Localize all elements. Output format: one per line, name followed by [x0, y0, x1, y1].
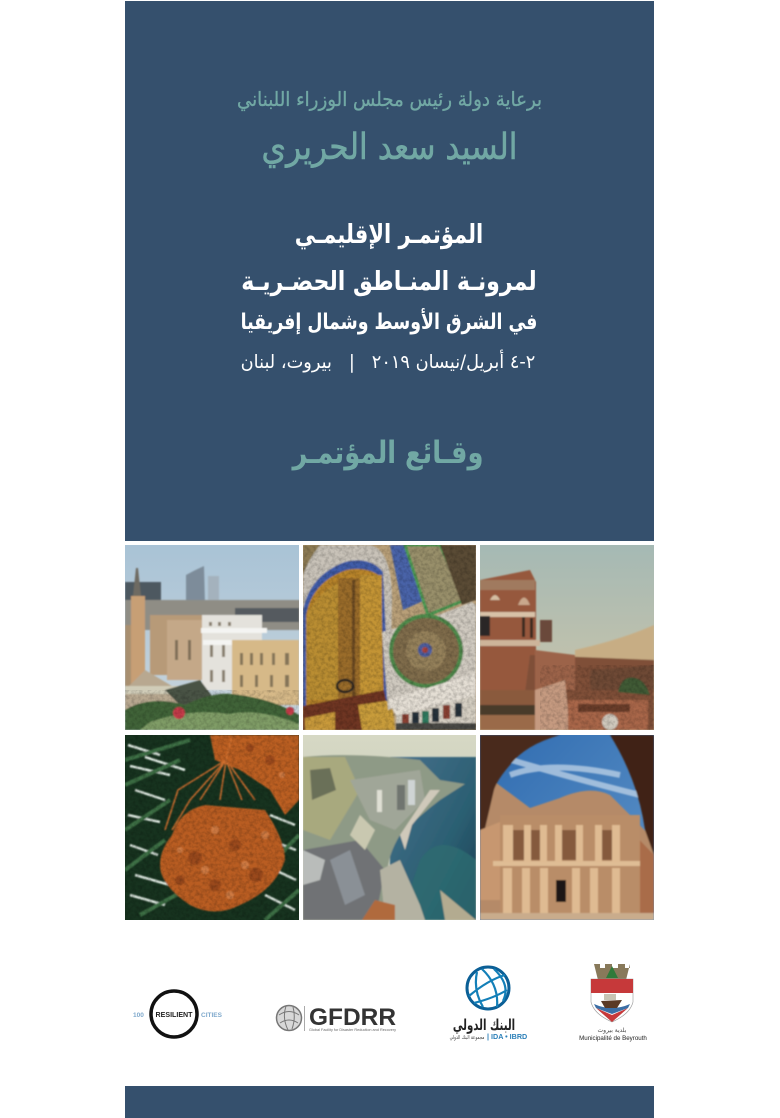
logo: GFDRR: Global Facility for Disaster Reduction and Recovery — [309, 1027, 396, 1032]
photo: Beirut downtown — [125, 545, 300, 730]
logo: World Bank: مجموعة البنك الدولي — [450, 1034, 485, 1041]
photo: Petra treasury — [480, 735, 654, 920]
logo: 100 Resilient Cities: CITIES — [201, 1012, 223, 1019]
logo: 100 Resilient Cities — [133, 991, 223, 1037]
patron name: السيد سعد الحريري — [262, 126, 517, 169]
footer band — [125, 1086, 654, 1118]
logo: GFDRR: GFDRR — [309, 1004, 396, 1031]
logo: World Bank: | IDA • IBRD — [487, 1032, 527, 1041]
logo: Municipality of Beirut: Municipalité de Beyrouth — [579, 1035, 647, 1042]
photo: Sanaa old city — [480, 545, 654, 730]
proceedings heading: وقـائع المؤتمـر — [291, 435, 483, 471]
photo: Moroccan door — [303, 545, 476, 730]
photo: Beirut coastline aerial — [303, 735, 476, 920]
logo: 100 Resilient Cities: 100 — [133, 1012, 144, 1019]
logo: Municipality of Beirut — [579, 964, 647, 1042]
logo: GFDRR — [276, 1004, 396, 1032]
logo: World Bank: البنك الدولي — [453, 1017, 515, 1035]
conference title line 2: لمرونـة المنـاطق الحضـريـة — [241, 266, 537, 296]
logo: 100 Resilient Cities: RESILIENT — [156, 1012, 193, 1019]
photo: date palm — [125, 735, 299, 920]
panel: title cover — [125, 1, 654, 541]
conference title line 3: في الشرق الأوسط وشمال إفريقيا — [241, 307, 537, 335]
patronage line: برعاية دولة رئيس مجلس الوزراء اللبناني — [237, 87, 542, 111]
conference title line 1: المؤتمـر الإقليمـي — [295, 219, 483, 250]
date and place: ٢-٤ أبريل/نيسان ٢٠١٩ | بيروت، لبنان — [241, 350, 535, 373]
logo: Municipality of Beirut: بلدية بيروت — [598, 1027, 627, 1034]
logo: World Bank — [450, 967, 527, 1041]
